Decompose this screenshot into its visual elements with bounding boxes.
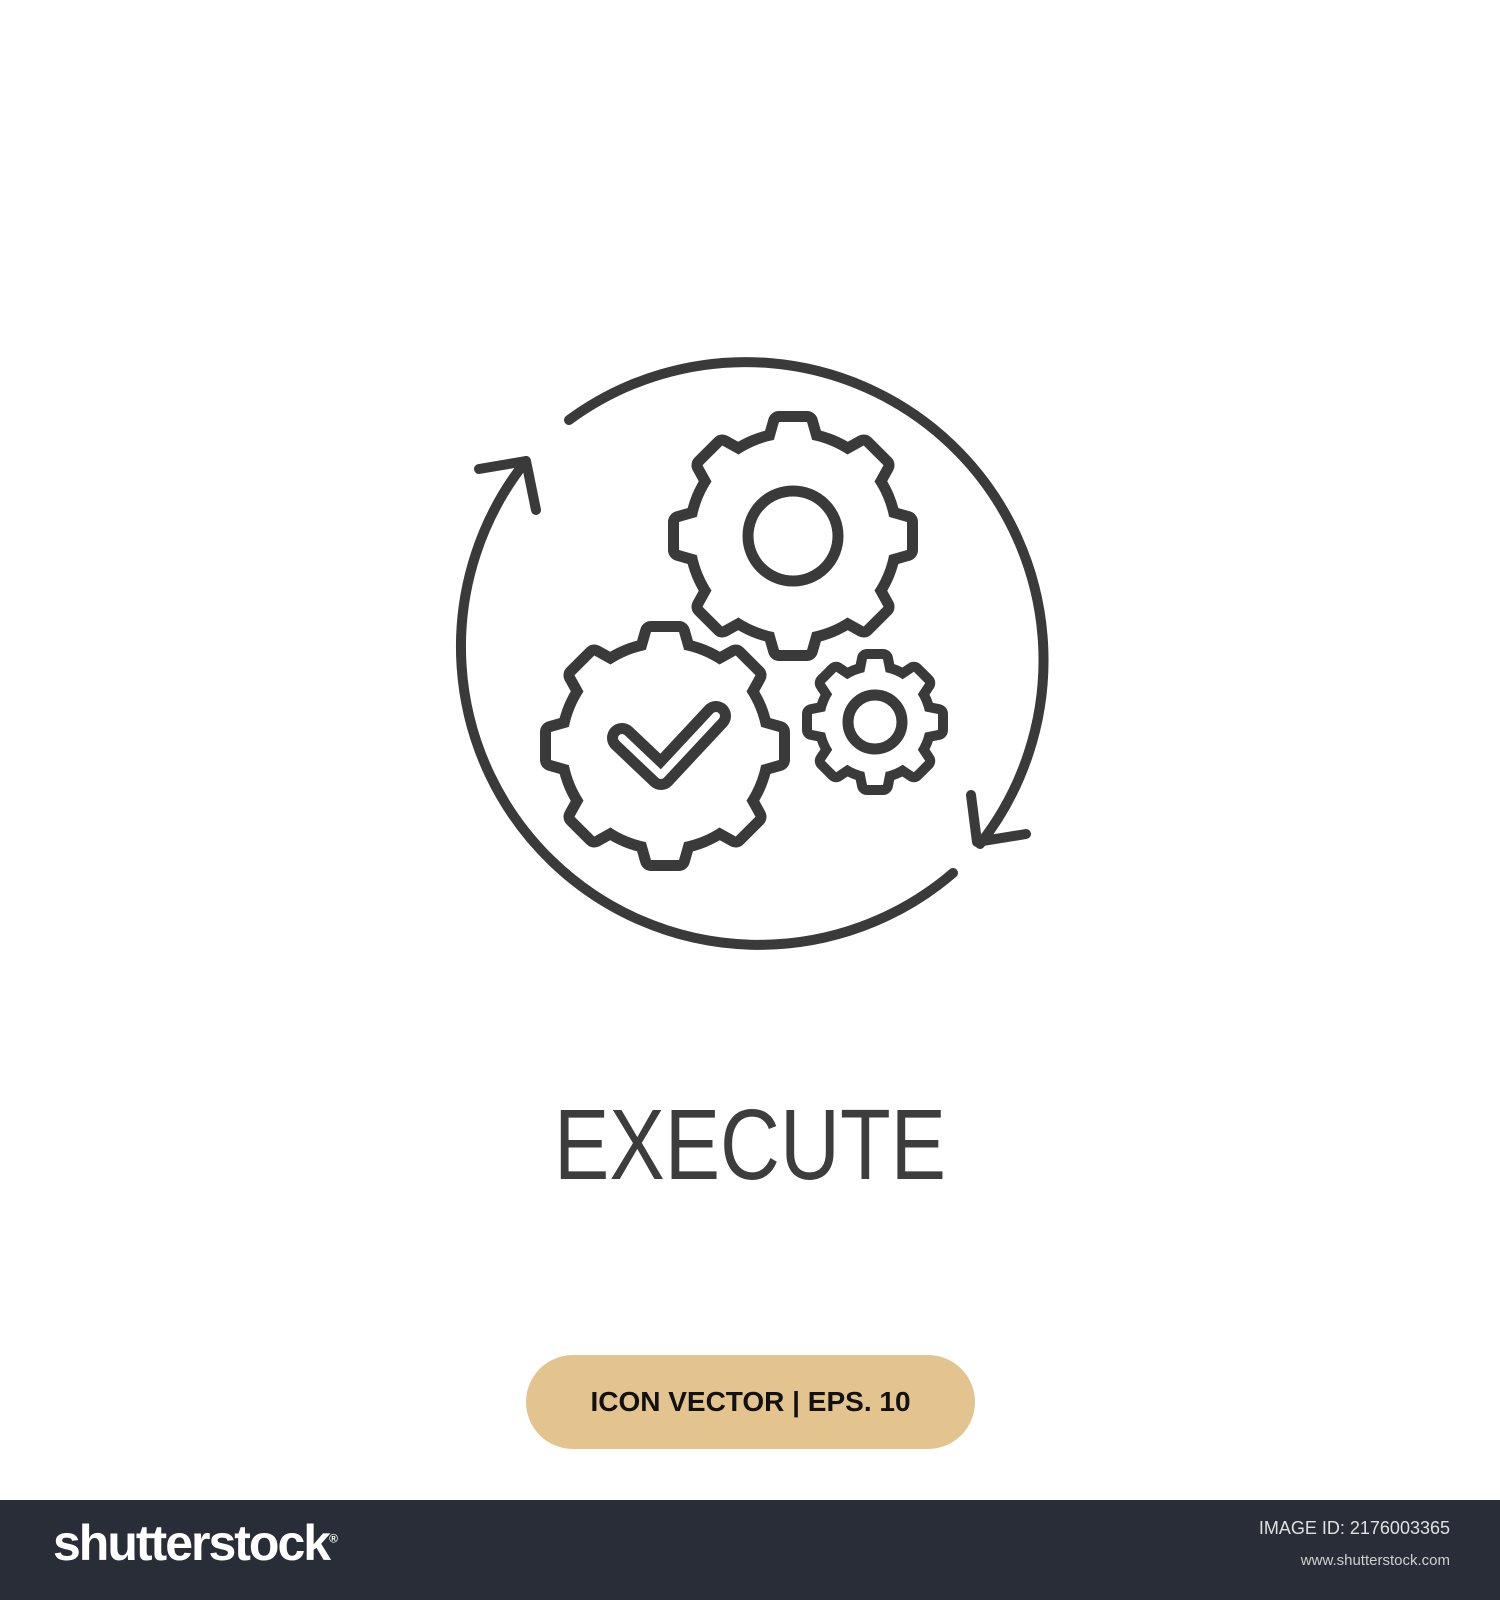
icon: execute cycle with gears	[456, 357, 1048, 950]
footer bar	[0, 1500, 1500, 1600]
badge: icon vector eps 10: ICON VECTOR | EPS. 10	[590, 1386, 911, 1417]
badge: icon vector eps 10	[526, 1355, 975, 1449]
icon: check mark	[622, 716, 716, 775]
icon: small gear	[812, 659, 938, 785]
logo: shutterstock: shutterstock®	[53, 1515, 336, 1571]
text: website: www.shutterstock.com	[1301, 1552, 1450, 1569]
icon: large gear	[679, 422, 907, 650]
text: image id: IMAGE ID: 2176003365	[1259, 1518, 1450, 1538]
arrow: circular top arc	[569, 362, 1044, 844]
arrow: circular bottom arc	[461, 461, 953, 945]
title: EXECUTE: EXECUTE	[554, 1089, 946, 1201]
icon: check gear	[551, 632, 779, 860]
